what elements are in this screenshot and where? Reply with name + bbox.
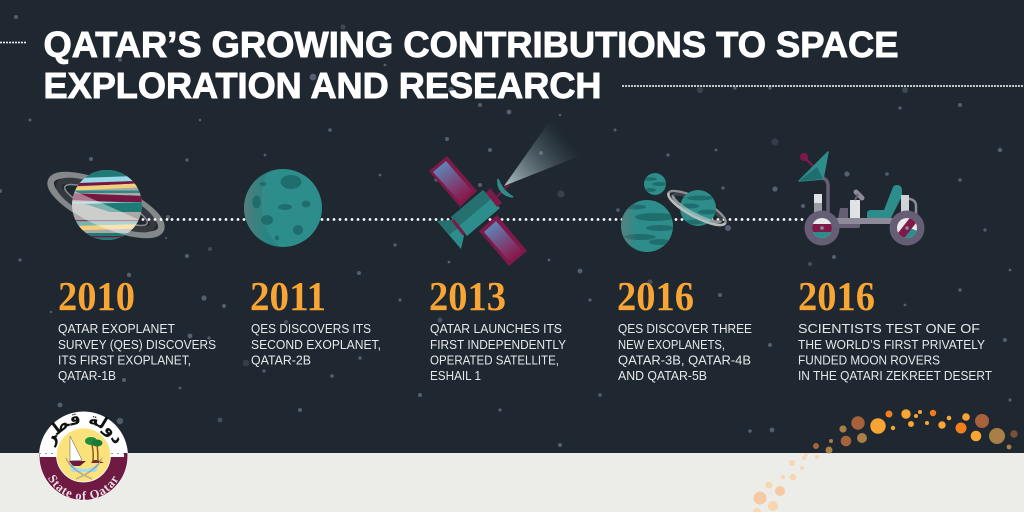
dish bbox=[498, 179, 513, 197]
milestone 2016 exoplanets bbox=[617, 273, 752, 383]
milestone 2010: QATAR-1B bbox=[58, 368, 116, 383]
orange particle swarm bbox=[753, 409, 1018, 512]
milestone 2013: FIRST INDEPENDENTLY bbox=[430, 337, 566, 352]
milestone 2013: OPERATED SATELLITE, bbox=[430, 352, 559, 368]
chassis bbox=[838, 208, 848, 219]
milestone 2016 moon rover: 2016 bbox=[798, 273, 875, 319]
control lever bbox=[856, 192, 862, 198]
milestone 2016 exoplanets: 2016 bbox=[617, 273, 694, 319]
milestone 2010: SURVEY (QES) DISCOVERS bbox=[58, 337, 216, 352]
rear box bbox=[814, 194, 822, 214]
rear cone bbox=[437, 220, 464, 249]
milestone 2013: 2013 bbox=[429, 273, 506, 319]
upper solar panel bbox=[429, 156, 477, 207]
milestone 2013 bbox=[429, 273, 566, 383]
milestone 2013: ESHAIL 1 bbox=[430, 368, 481, 383]
seat bbox=[867, 185, 902, 218]
bottom band bbox=[0, 453, 1024, 512]
milestone 2016 moon rover: IN THE QATARI ZEKREET DESERT bbox=[798, 368, 992, 383]
seal emblem bbox=[56, 428, 110, 482]
icon: three exoplanets Qatar-3b, 4b, 5b bbox=[621, 173, 729, 252]
title: QATAR’S GROWING CONTRIBUTIONS TO SPACE bbox=[44, 24, 898, 65]
title bbox=[44, 24, 898, 106]
icon: ringed exoplanet Qatar-1b bbox=[47, 170, 165, 240]
rear wheel bbox=[890, 210, 924, 246]
seal English text: State of Qatar bbox=[48, 475, 118, 500]
milestone 2016 exoplanets: QATAR-3B, QATAR-4B bbox=[618, 352, 751, 368]
ringed planet bbox=[667, 190, 727, 226]
milestone 2016 moon rover bbox=[798, 273, 992, 383]
icon: exoplanet Qatar-2b bbox=[244, 169, 322, 250]
milestone 2011: 2011 bbox=[250, 273, 326, 319]
front wheel bbox=[804, 210, 840, 246]
milestone 2010: ITS FIRST EXOPLANET, bbox=[58, 352, 191, 368]
milestone 2016 exoplanets: NEW EXOPLANETS, bbox=[618, 337, 725, 352]
milestone 2011 bbox=[250, 273, 381, 368]
State of Qatar seal bbox=[39, 412, 128, 500]
signal beam bbox=[504, 118, 582, 186]
title: EXPLORATION AND RESEARCH bbox=[44, 65, 602, 106]
milestone 2016 exoplanets: AND QATAR-5B bbox=[618, 368, 707, 383]
antenna bbox=[799, 152, 828, 214]
milestone 2016 moon rover: SCIENTISTS TEST ONE OF bbox=[798, 321, 980, 336]
milestone 2011: QES DISCOVERS ITS bbox=[251, 321, 371, 336]
seal Arabic text: دولة قطر bbox=[50, 414, 120, 448]
seat back frame bbox=[901, 199, 916, 218]
milestone 2016 moon rover: FUNDED MOON ROVERS bbox=[798, 352, 940, 368]
lower solar panel bbox=[479, 215, 527, 266]
battery block bbox=[850, 200, 860, 218]
milestone 2011: QATAR-2B bbox=[251, 352, 311, 368]
large planet bbox=[621, 200, 675, 252]
milestone 2010 bbox=[58, 273, 216, 383]
milestone 2010: QATAR EXOPLANET bbox=[58, 321, 175, 336]
milestone 2016 exoplanets: QES DISCOVER THREE bbox=[618, 321, 752, 336]
milestone 2016 moon rover: THE WORLD’S FIRST PRIVATELY bbox=[798, 337, 985, 352]
satellite body bbox=[451, 190, 500, 236]
milestone 2011: SECOND EXOPLANET, bbox=[251, 337, 381, 352]
icon: Eshail 1 satellite bbox=[429, 118, 582, 266]
milestone 2013: QATAR LAUNCHES ITS bbox=[430, 321, 562, 336]
milestone 2010: 2010 bbox=[58, 273, 135, 319]
icon: moon rover bbox=[799, 152, 924, 246]
small planet bbox=[644, 173, 666, 195]
